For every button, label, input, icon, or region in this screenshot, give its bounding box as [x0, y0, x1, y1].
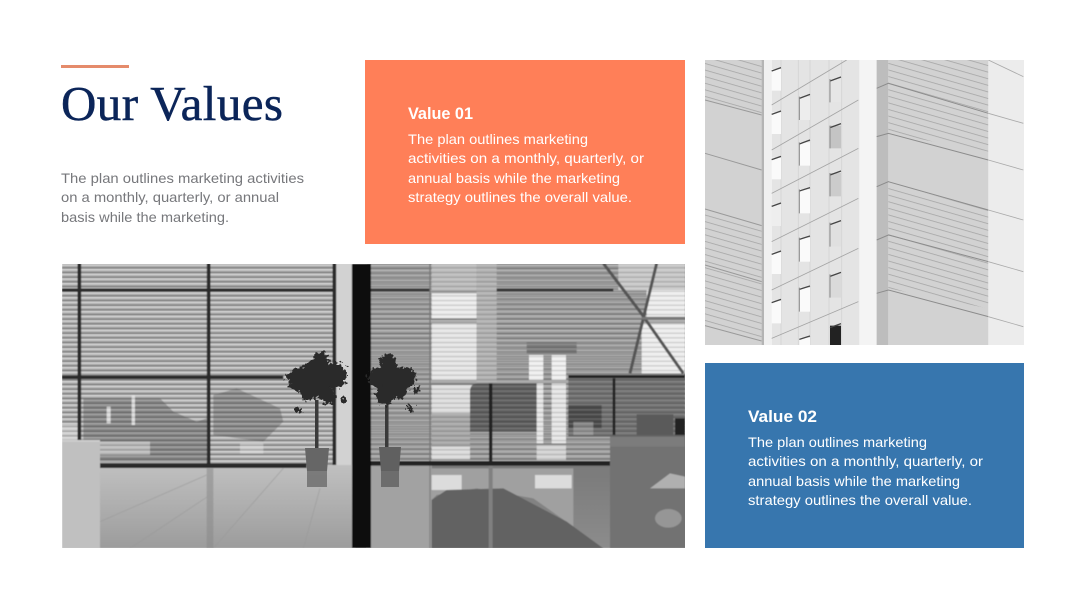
left wall	[705, 60, 762, 347]
right wall	[888, 60, 988, 347]
text: value 02 body	[748, 434, 983, 508]
heading: value 02: Value 02	[748, 407, 817, 426]
icon: left potted tree	[285, 352, 347, 487]
intro text: on a monthly, quarterly, or annual	[61, 189, 279, 205]
panel: value 01	[365, 60, 685, 244]
intro text: The plan outlines marketing activities	[61, 170, 304, 186]
text: value 02 body: activities on a monthly, quarterly, or	[748, 453, 983, 469]
intro text: basis while the marketing.	[61, 209, 229, 225]
text: value 02 body: strategy outlines the overall value.	[748, 492, 972, 508]
text: value 01 body: activities on a monthly, quarterly, or	[408, 150, 644, 166]
text: value 02 body: annual basis while the marketing	[748, 473, 960, 489]
title: Our Values	[61, 76, 283, 131]
photo: building facade	[705, 60, 1025, 351]
text: value 01 body: annual basis while the marketing	[408, 170, 620, 186]
photo: office lobby	[62, 263, 687, 548]
panel: value 02	[705, 363, 1024, 548]
text: value 01 body: The plan outlines marketing	[408, 131, 588, 147]
intro text	[61, 170, 304, 225]
central column	[764, 60, 859, 347]
text: value 02 body: The plan outlines marketing	[748, 434, 927, 450]
text: value 01 body: strategy outlines the overall value.	[408, 189, 632, 205]
text: value 01 body	[408, 131, 644, 205]
windows	[772, 69, 841, 351]
accent bar	[61, 65, 129, 68]
icon: right potted tree	[368, 354, 419, 487]
corner pillar	[859, 60, 877, 347]
central black column	[352, 264, 371, 548]
heading: value 01: Value 01	[408, 104, 473, 123]
